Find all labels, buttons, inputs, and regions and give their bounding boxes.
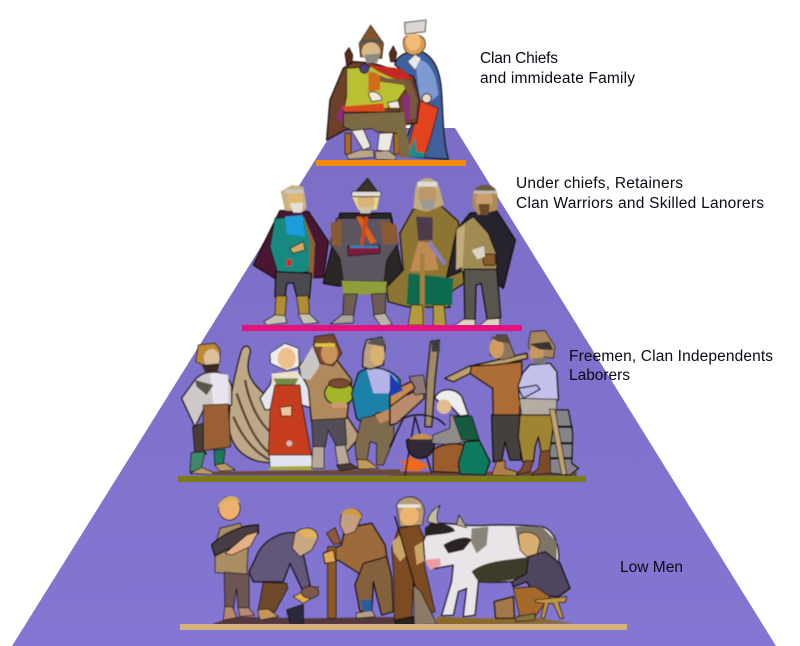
tier 1 label: Clan Chiefs [480,50,558,67]
cauldron and tripod [390,415,445,475]
milker on stool [512,532,570,622]
ground patch [437,617,573,625]
tier 3 base bar [178,476,586,482]
tier 4 base bar [180,624,627,630]
man in blue [352,337,400,469]
bucket [494,597,514,618]
tier 3 figures right: cook at cauldron, laborers, barrel [390,331,578,476]
woman in red [260,343,313,470]
tier 2 label [516,175,764,212]
boat [229,346,360,462]
youth carrying wood [212,496,258,620]
tier 2 base bar [242,325,522,331]
retainer with gold cloak [387,178,464,327]
retainer with chainmail tunic [323,178,405,327]
tier 4 figures left: low men laborers [212,496,415,624]
laborer with crossed arms [517,331,567,475]
tier 2 label: Under chiefs, Retainers [516,175,683,192]
smith [182,343,235,475]
barrel [547,410,578,475]
tier 3 figures left: freemen smith, boat, woman, man with pot [182,334,400,475]
retainer with teal tunic [253,185,328,325]
cross post and axe [390,340,440,427]
tier 3 label [569,348,773,384]
tier 4 figures right: woman with broom, cow, milker [392,497,573,625]
bending man [249,528,319,623]
man with green pot [298,334,358,471]
throne [345,46,399,154]
tier 4 label: Low Men [620,559,683,576]
tier 1 figures: clan chief on throne with wife [327,20,448,160]
tier 1 label: and immideate Family [480,70,635,87]
tier 1 label [480,50,635,87]
chief [327,25,420,160]
tier 1 base bar [316,160,466,166]
tier 2 figures: under chiefs and retainers [253,178,515,328]
pyramid background [12,128,776,646]
tier 2 label: Clan Warriors and Skilled Lanorers [516,195,764,212]
tier 3 label: Laborers [569,367,630,384]
cow [423,506,559,617]
man with mattock [323,508,393,618]
ground strip [390,472,577,476]
fire [395,457,428,472]
retainer with black cape [447,185,515,328]
ground strip [213,469,400,475]
ground strip [213,617,415,624]
broom carrier [392,497,437,625]
tier 3 label: Freemen, Clan Independents [569,348,773,365]
wife [395,20,448,159]
laborer carrying pole [445,334,527,476]
kneeling woman [432,390,490,475]
